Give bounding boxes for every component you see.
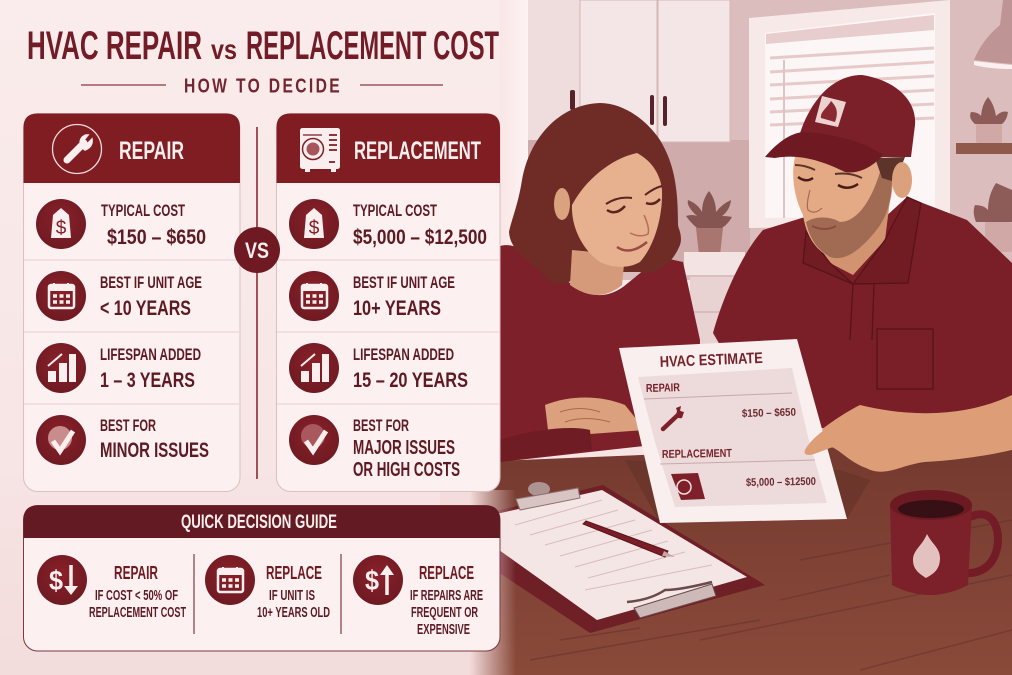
cap crown xyxy=(800,75,915,157)
repair: lifespan added: 1 – 3 YEARS xyxy=(100,369,195,392)
replacement: best for: MAJOR ISSUES xyxy=(353,437,455,459)
guide item: replace if frequent: FREQUENT OR xyxy=(411,605,478,621)
paper title: HVAC ESTIMATE xyxy=(659,350,763,371)
woman's face xyxy=(572,153,662,267)
paper wrench icon xyxy=(663,413,680,429)
counter and lower cabinet xyxy=(684,252,745,347)
repair: lifespan added xyxy=(36,343,201,393)
repair: typical cost: $ xyxy=(56,218,67,239)
man's beard xyxy=(806,172,892,258)
replacement: typical cost: $ xyxy=(309,218,320,239)
window with blinds xyxy=(749,0,950,228)
cap logo xyxy=(815,96,846,127)
title: HVAC REPAIR xyxy=(27,24,202,68)
pendant lamp xyxy=(974,0,1012,69)
replacement: lifespan added: 15 – 20 YEARS xyxy=(353,369,468,392)
replacement: typical cost xyxy=(289,199,487,249)
woman's neck xyxy=(570,250,625,295)
shelf with plants xyxy=(956,97,1012,252)
finger over paper xyxy=(805,420,860,455)
guide item: replace if frequent xyxy=(353,555,483,638)
replacement: unit age xyxy=(289,271,455,321)
replacement: typical cost: $5,000 – $12,500 xyxy=(353,226,487,249)
title xyxy=(27,24,499,68)
paper repair label: REPAIR xyxy=(646,382,681,395)
man's ear xyxy=(892,162,912,198)
man's sideburn xyxy=(875,157,905,182)
replacement: lifespan added xyxy=(289,343,468,393)
panel: repair xyxy=(24,114,240,492)
repair: unit age: BEST IF UNIT AGE xyxy=(100,274,202,292)
VS badge: VS xyxy=(245,238,269,263)
repair: unit age xyxy=(36,271,202,321)
woman's facial features xyxy=(606,186,662,251)
woman's ear xyxy=(554,188,570,220)
panel: replacement xyxy=(276,114,500,492)
repair: best for: MINOR ISSUES xyxy=(100,439,209,462)
paper repair price: $150 – $650 xyxy=(742,407,796,420)
paper shadow xyxy=(625,460,870,523)
repair: best for xyxy=(36,415,209,465)
center divider xyxy=(256,127,258,479)
replacement: unit age: BEST IF UNIT AGE xyxy=(353,274,455,292)
woman's shirt xyxy=(500,245,700,462)
VS badge xyxy=(234,227,280,273)
replacement: best for: OR HIGH COSTS xyxy=(353,459,460,481)
subtitle: HOW TO DECIDE xyxy=(184,76,342,98)
table xyxy=(470,440,1012,675)
title: REPLACEMENT COST xyxy=(246,24,499,68)
repair: typical cost: TYPICAL COST xyxy=(101,202,185,220)
man's shirt xyxy=(713,197,1012,430)
counter plant xyxy=(686,191,732,255)
repair: typical cost xyxy=(36,199,206,249)
clipboard top clip xyxy=(516,482,580,510)
woman's sleeve xyxy=(500,428,592,462)
replacement: best for: BEST FOR xyxy=(353,417,409,435)
guide item: replace by age: 10+ YEARS OLD xyxy=(257,605,330,621)
paper AC icon xyxy=(671,473,705,500)
guide item: replace if frequent: EXPENSIVE xyxy=(417,622,470,638)
repair: best for: BEST FOR xyxy=(100,417,156,435)
guide heading: QUICK DECISION GUIDE xyxy=(181,512,337,533)
replacement: typical cost: TYPICAL COST xyxy=(353,202,437,220)
coffee mug xyxy=(890,490,998,595)
woman's hair xyxy=(509,103,681,284)
paper replacement label: REPLACEMENT xyxy=(662,448,732,461)
man's neck xyxy=(815,200,890,275)
repair: unit age: < 10 YEARS xyxy=(100,297,191,320)
guide item: replace by age: REPLACE xyxy=(266,563,322,583)
repair wrench icon xyxy=(52,124,102,174)
paper wrench head xyxy=(676,406,684,418)
shirt collar and placket xyxy=(803,197,933,389)
replacement AC unit icon xyxy=(300,128,340,172)
kitchen backsplash xyxy=(528,140,750,265)
title: vs xyxy=(211,34,237,65)
man's eyes xyxy=(795,165,862,229)
man xyxy=(713,75,1012,472)
replacement: best for xyxy=(289,415,460,481)
guide item: repair: REPLACEMENT COST xyxy=(89,605,186,621)
pen xyxy=(583,521,675,557)
paper replacement price: $5,000 – $12500 xyxy=(746,476,816,489)
guide item: replace by age xyxy=(205,555,330,621)
mug flame logo xyxy=(913,534,940,578)
estimate paper xyxy=(619,339,847,523)
panel: quick decision guide xyxy=(24,506,500,651)
guide item: repair: IF COST < 50% OF xyxy=(95,588,178,604)
guide item: repair xyxy=(37,555,186,621)
upper cabinets xyxy=(528,0,730,142)
replacement: lifespan added: LIFESPAN ADDED xyxy=(353,346,454,364)
replacement heading: REPLACEMENT xyxy=(354,137,481,165)
clipboard with paper xyxy=(480,482,765,633)
cap brim xyxy=(765,132,883,172)
guide item: replace by age: IF UNIT IS xyxy=(269,588,315,604)
woman xyxy=(500,103,700,462)
guide item: repair: $ xyxy=(49,565,63,596)
guide item: replace if frequent: REPLACE xyxy=(419,563,474,583)
clipboard bottom clip xyxy=(627,582,716,618)
repair: lifespan added: LIFESPAN ADDED xyxy=(100,346,201,364)
left panel fade into table xyxy=(440,490,516,675)
replacement: unit age: 10+ YEARS xyxy=(353,297,441,320)
guide item: replace if frequent: $ xyxy=(365,565,379,596)
repair: typical cost: $150 – $650 xyxy=(107,226,206,249)
man's face xyxy=(793,150,893,258)
repair heading: REPAIR xyxy=(119,137,184,165)
man's forearm and pointing hand xyxy=(804,395,1012,472)
guide item: repair: REPAIR xyxy=(114,563,158,583)
woman's hands xyxy=(545,398,645,434)
guide item: replace if frequent: IF REPAIRS ARE xyxy=(410,588,483,604)
